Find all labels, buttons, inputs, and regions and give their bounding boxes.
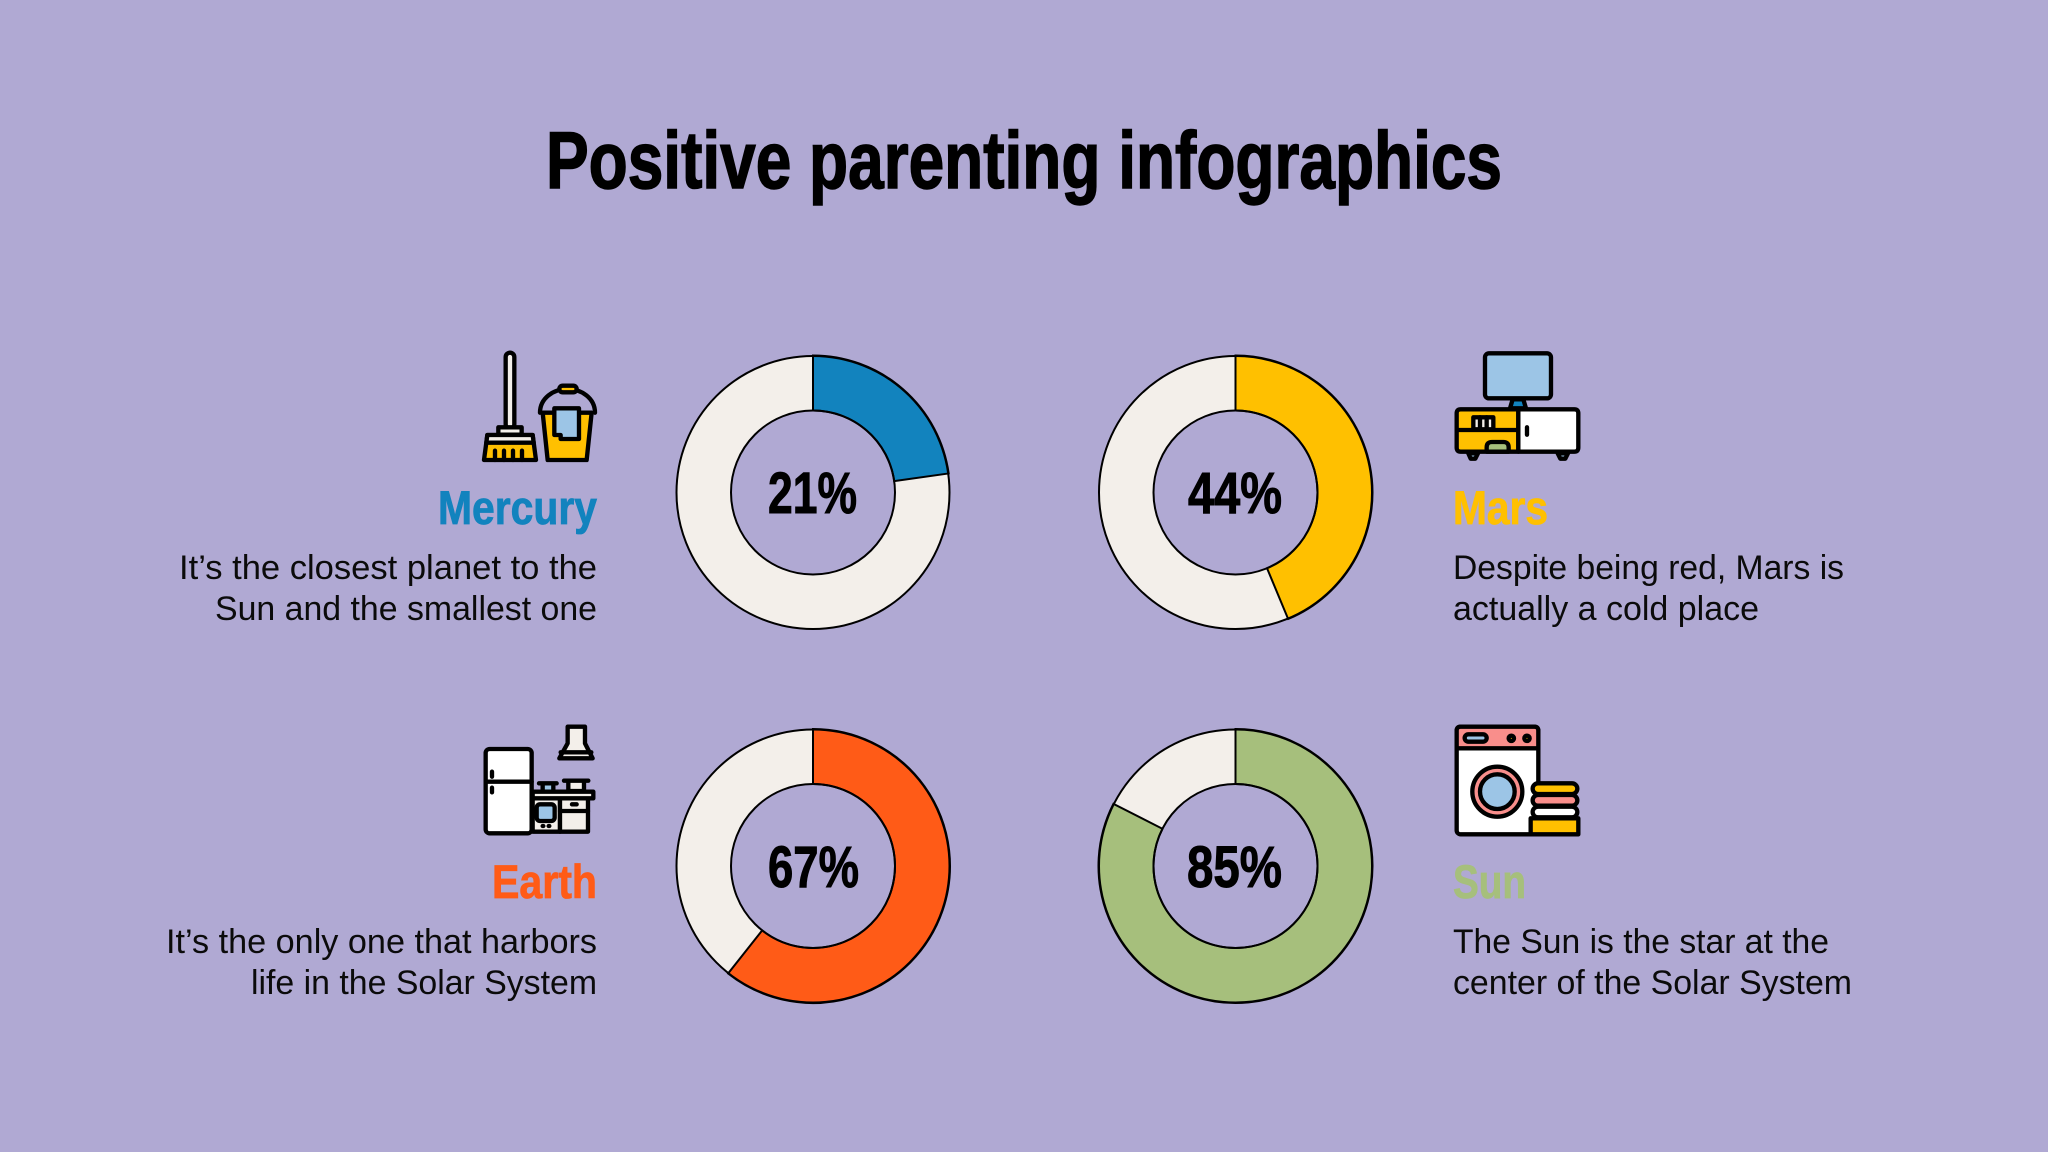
panel: Sun — [1453, 727, 1852, 1002]
heading: Mercury: Mercury — [438, 481, 597, 534]
icon: kitchen — [486, 727, 593, 833]
text: Mercury description: Sun and the smallest one — [215, 590, 597, 628]
chart: Earth donut 67% — [676, 729, 950, 1003]
text: Sun description: center of the Solar System — [1453, 964, 1852, 1002]
title: Positive parenting infographics — [546, 116, 1502, 206]
icon: washing machine and towels — [1457, 727, 1578, 834]
text: Mars description: actually a cold place — [1453, 590, 1759, 628]
panel: Mercury — [179, 353, 597, 628]
chart: Earth donut 67%: 67% — [768, 835, 859, 900]
panel: Earth — [166, 727, 597, 1002]
text: Earth description — [166, 923, 597, 1002]
icon: TV and cabinet — [1457, 353, 1578, 459]
chart: Sun donut 85% — [1098, 729, 1372, 1003]
chart: Mars donut 44%: 44% — [1188, 461, 1282, 526]
text: Mercury description: It’s the closest planet to the — [179, 549, 597, 587]
chart: Mercury donut 21% — [676, 356, 950, 629]
heading: Sun: Sun — [1453, 855, 1526, 908]
text: Earth description: It’s the only one that harbors — [166, 923, 597, 961]
panel: Mars — [1453, 353, 1844, 628]
chart: Mars donut 44% — [1099, 356, 1373, 629]
text: Mercury description — [179, 549, 597, 628]
chart: Mercury donut 21%: 21% — [768, 461, 857, 526]
text: Sun description — [1453, 923, 1852, 1002]
text: Mars description: Despite being red, Mars is — [1453, 549, 1844, 587]
text: Earth description: life in the Solar System — [251, 964, 597, 1002]
heading: Mars: Mars — [1453, 481, 1548, 534]
text: Mars description — [1453, 549, 1844, 628]
heading: Earth: Earth — [492, 855, 597, 908]
text: Sun description: The Sun is the star at the — [1453, 923, 1829, 961]
chart: Sun donut 85%: 85% — [1187, 835, 1282, 900]
icon: broom and bucket — [484, 353, 595, 460]
